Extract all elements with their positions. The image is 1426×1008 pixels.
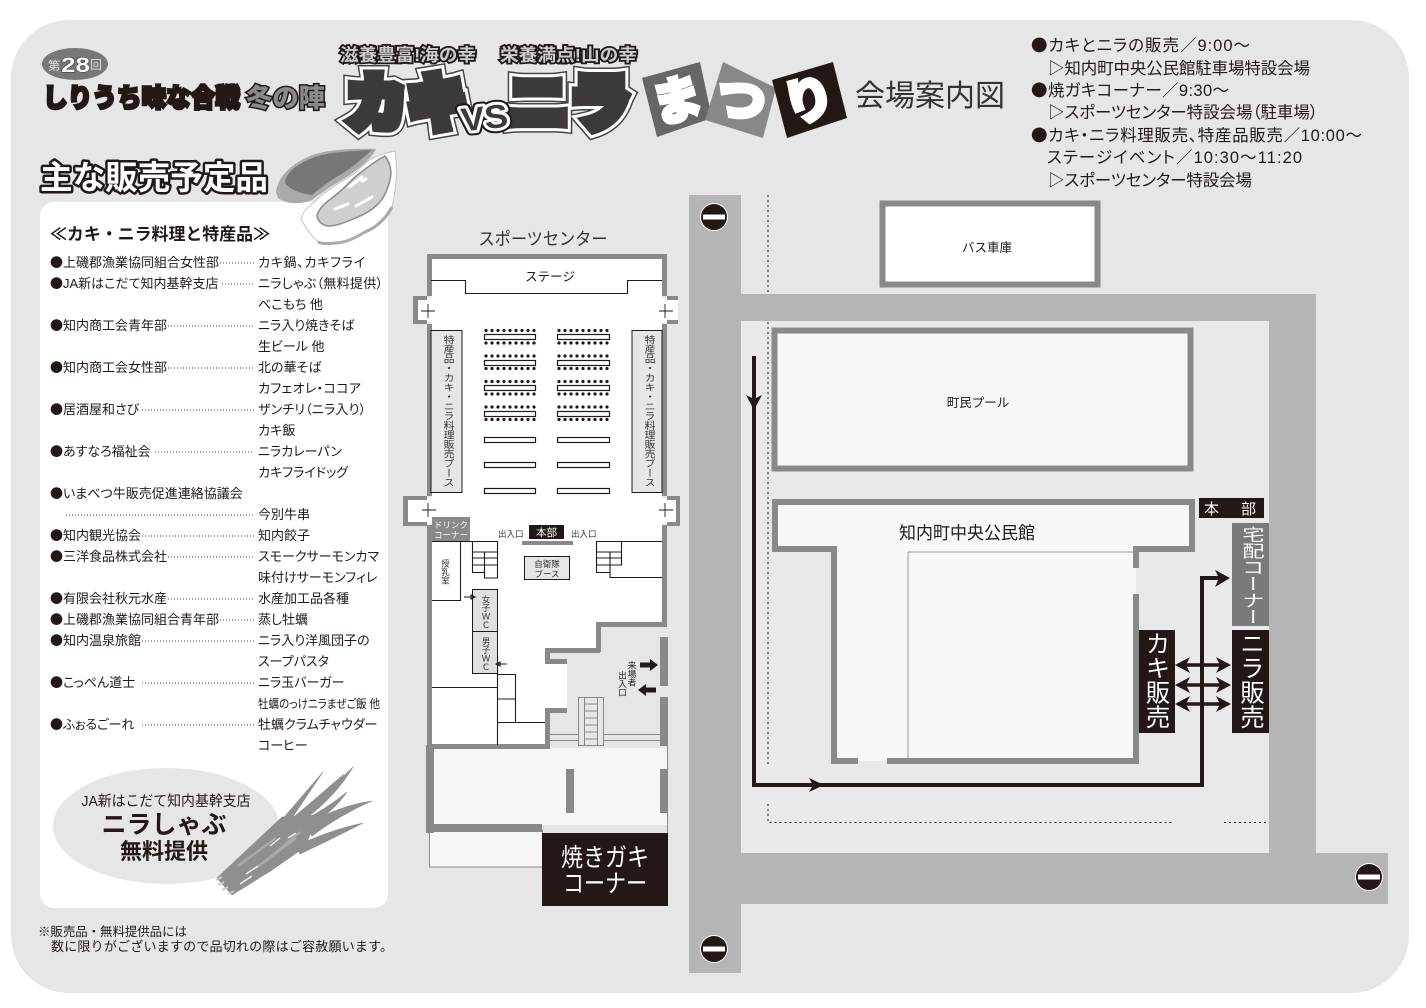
icon: no entry signs (700, 204, 1382, 962)
callout: free nira shabu: 無料提供 (120, 839, 208, 864)
drink corner: ドリンク (434, 520, 468, 530)
label: oyster sales: カキ販売 (1142, 631, 1170, 729)
subtitle: しりうち味な合戦 冬の陣: 冬の陣 (246, 83, 325, 113)
label: chive sales: ニラ販売 (1237, 631, 1264, 729)
item list: ●居酒屋和さび (50, 399, 140, 418)
visitor entrance: 出入口 (618, 670, 628, 696)
interior floor (431, 259, 662, 745)
entrances and HQ: 出入口 (571, 529, 597, 539)
restroom arrows (464, 595, 507, 666)
panel: sale items (40, 202, 388, 908)
label: delivery corner (1232, 523, 1269, 626)
item list: ●いまべつ牛販売促進連絡協議会 (50, 483, 243, 502)
item list: カキフライドッグ (258, 465, 349, 480)
drink corner: コーナー (434, 530, 468, 540)
nursing room: 授乳室 (440, 558, 450, 584)
chairs (486, 330, 609, 420)
building: bus garage (882, 204, 1098, 284)
room lines and stairs (432, 541, 662, 745)
road map background (689, 195, 1388, 973)
item list: 蒸し牡蠣 (258, 612, 308, 627)
item list: ●こっぺん道士 (50, 672, 135, 691)
outdoor parking areas (430, 745, 668, 867)
tables (484, 334, 610, 494)
item list: ●知内温泉旅館 (50, 630, 141, 649)
catch copy: 滋養豊富!海の幸 (340, 45, 476, 65)
item list: 味付けサーモンフィレ (258, 570, 377, 585)
grilled oyster corner: コーナー (563, 870, 647, 898)
building name: スポーツセンター (478, 229, 608, 249)
badge: 28th edition: 回 (90, 58, 102, 72)
building: town pool (774, 330, 1190, 468)
item list: ニラ入り焼きそば (258, 318, 355, 333)
main title: カキ vs ニラ: ニラ (507, 70, 631, 139)
side alcoves (405, 298, 678, 524)
schedule text block: ▷知内町中央公民館駐車場特設会場 (1048, 59, 1310, 78)
main title: カキ vs ニラ: ニラ (507, 70, 631, 139)
route arrows (746, 356, 1230, 792)
item list: ニラしゃぶ（無料提供） (258, 276, 383, 291)
panel heading: ≪カキ・ニラ料理と特産品≫ (50, 225, 270, 244)
entrances and HQ: 出入口 (498, 529, 524, 539)
stage (431, 270, 662, 294)
restrooms (472, 590, 498, 674)
heading: 主な販売予定品: 主な販売予定品 (40, 159, 268, 196)
item list: 生ビール 他 (258, 339, 325, 354)
item list: カキ鍋、カキフライ (258, 255, 365, 270)
label: headquarters: 部 (1241, 501, 1256, 518)
item list: 今別牛串 (258, 507, 310, 522)
badge: 28th edition (42, 48, 108, 80)
item list: ●上磯郡漁業協同組合青年部 (50, 609, 219, 628)
badge: 28th edition: 第 (48, 59, 60, 73)
schedule text block: ▷スポーツセンター特設会場（駐車場） (1048, 103, 1318, 122)
item list: スモークサーモンカマ (258, 549, 380, 564)
item list: ニラ玉バーガー (258, 675, 345, 690)
footnote: ※販売品・無料提供品には (38, 924, 187, 939)
walls (403, 254, 680, 833)
visitor entrance (618, 659, 658, 696)
label: chive sales (1232, 630, 1269, 733)
item list: ●ふぉるごーれ (50, 714, 134, 733)
title tiles: まつり: ま (646, 67, 709, 134)
icon: oyster (276, 149, 396, 245)
label: headquarters (1199, 498, 1264, 518)
item list: ニラ入り洋風団子の (258, 633, 370, 648)
footnote: 数に限りがございますので品切れの際はご容赦願います。 (51, 939, 393, 954)
title tiles: まつり: り (777, 67, 841, 135)
visitor entrance: 来場者 (627, 661, 637, 687)
schedule text block: ステージイベント／10:30～11:20 (1047, 148, 1302, 167)
door crosses (421, 304, 673, 517)
item list: 知内餃子 (258, 528, 310, 543)
grilled oyster corner: 焼きガキ (561, 844, 649, 872)
building: community center (775, 502, 1192, 761)
label: headquarters: 本 (1204, 501, 1219, 518)
floor plan: sports center (403, 229, 680, 906)
item list: 水産加工品各種 (258, 591, 349, 606)
item list: カフェオレ・ココア (258, 381, 361, 396)
booth right: 特産品・カキ・ニラ料理販売ブース (642, 335, 655, 487)
entrances and HQ: 本部 (536, 526, 557, 539)
item list: 北の華そば (258, 360, 322, 375)
schedule text block: ●焼ガキコーナー／9:30～ (1031, 77, 1229, 101)
item list: ●知内観光協会 (50, 525, 141, 544)
booth left: 特産品・カキ・ニラ料理販売ブース (441, 335, 454, 487)
callout: free nira shabu (53, 768, 279, 884)
schedule text block: ●カキとニラの販売／9:00～ (1031, 32, 1250, 56)
item list: ●知内商工会女性部 (50, 357, 167, 376)
SDF booth: 自衛隊 (534, 559, 560, 569)
main title: カキ vs ニラ: VS (459, 97, 510, 138)
subtitle: しりうち味な合戦 冬の陣: しりうち味な合戦 (43, 83, 240, 113)
icon: garlic chives (216, 767, 372, 895)
item list: ●上磯郡漁業協同組合女性部 (50, 252, 219, 271)
booth right (632, 330, 662, 492)
item list: カキ飯 (258, 423, 295, 438)
main title: カキ vs ニラ: カキ (346, 70, 468, 139)
grilled oyster corner (542, 833, 668, 906)
item list: ●有限会社秋元水産 (50, 588, 167, 607)
item list: スープパスタ (258, 654, 329, 669)
schedule text block (1031, 32, 1362, 190)
item list: 牡蠣クラムチャウダー (258, 717, 377, 732)
title tiles: まつり: つ (710, 68, 772, 134)
entrances and HQ (498, 525, 597, 545)
SDF booth: ブース (534, 569, 560, 579)
building: town pool: 町民プール (947, 396, 1009, 410)
title tiles: まつり (642, 62, 847, 138)
item list: ●あすなろ福祉会 (50, 441, 151, 460)
item list: ●知内商工会青年部 (50, 315, 167, 334)
callout: free nira shabu: JA新はこだて知内基幹支店 (82, 793, 250, 810)
main title: カキ vs ニラ: ニラ (507, 70, 631, 139)
main title: カキ vs ニラ: カキ (346, 70, 468, 139)
drink corner (432, 517, 470, 541)
item list: 牡蠣のっけニラまぜご飯 他 (258, 696, 380, 711)
footnote (38, 924, 393, 954)
item list: コーヒー (258, 738, 308, 753)
item list (50, 252, 383, 753)
main title: カキ vs ニラ (346, 70, 631, 139)
badge: 28th edition: 28 (61, 54, 90, 77)
dashed site boundary (768, 195, 1269, 822)
building: community center: 知内町中央公民館 (899, 523, 1035, 543)
item list: ●JA新はこだて知内基幹支店 (50, 273, 219, 292)
catch copy (340, 45, 637, 65)
callout: free nira shabu: ニラしゃぶ (101, 811, 227, 839)
booth left (431, 330, 462, 492)
heading: 会場案内図: 会場案内図 (855, 80, 1005, 113)
stage: ステージ (525, 270, 575, 284)
item list: ニラカレーパン (258, 444, 342, 459)
double arrows between stalls (1175, 657, 1231, 712)
item list: ザンチリ（ニラ入り） (258, 402, 366, 417)
entrance stairs (550, 697, 660, 746)
catch copy: 栄養満点!山の幸 (500, 45, 637, 65)
main title: カキ vs ニラ: カキ (346, 70, 468, 139)
restrooms: 男子ＷＣ (481, 637, 491, 671)
schedule text block: ●カキ・ニラ料理販売、特産品販売／10:00～ (1031, 122, 1362, 146)
label: delivery corner: 宅配コーナー (1238, 526, 1263, 625)
building: bus garage: バス車庫 (962, 241, 1012, 255)
restrooms: 女子ＷＣ (481, 594, 491, 629)
schedule text block: ▷スポーツセンター特設会場 (1048, 171, 1252, 190)
SDF booth (524, 556, 570, 580)
item list: ●三洋食品株式会社 (50, 546, 167, 565)
main title: カキ vs ニラ: VS (459, 97, 510, 138)
item list: べこもち 他 (258, 297, 323, 312)
